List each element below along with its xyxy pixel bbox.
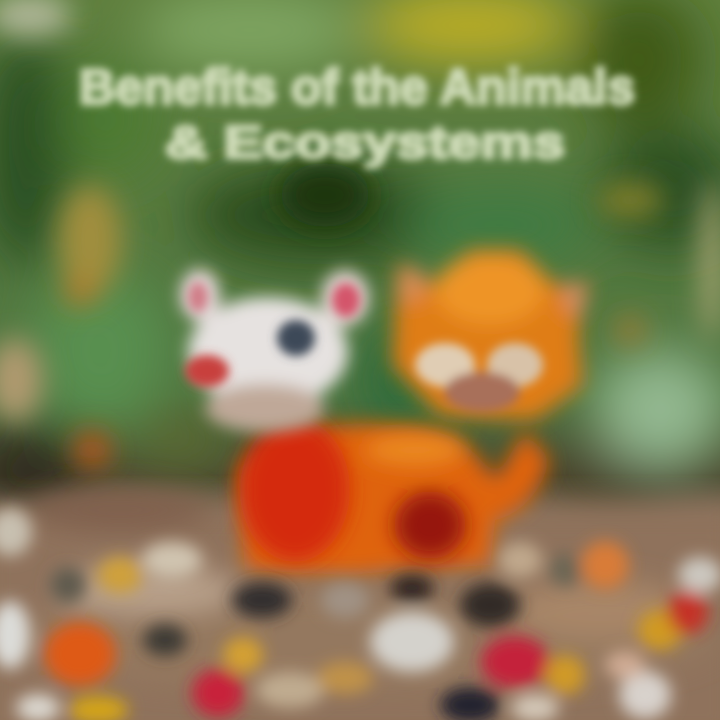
illustration: orange cat behind <box>392 250 590 420</box>
ground <box>0 505 720 720</box>
illustration: white animal head <box>180 269 369 432</box>
illustration: red-orange animal body <box>238 418 550 575</box>
title: Benefits of the Animals <box>79 59 635 115</box>
title: & Ecosystems <box>165 116 565 168</box>
title <box>79 59 635 168</box>
foreground: scattered pebbles <box>0 488 720 720</box>
